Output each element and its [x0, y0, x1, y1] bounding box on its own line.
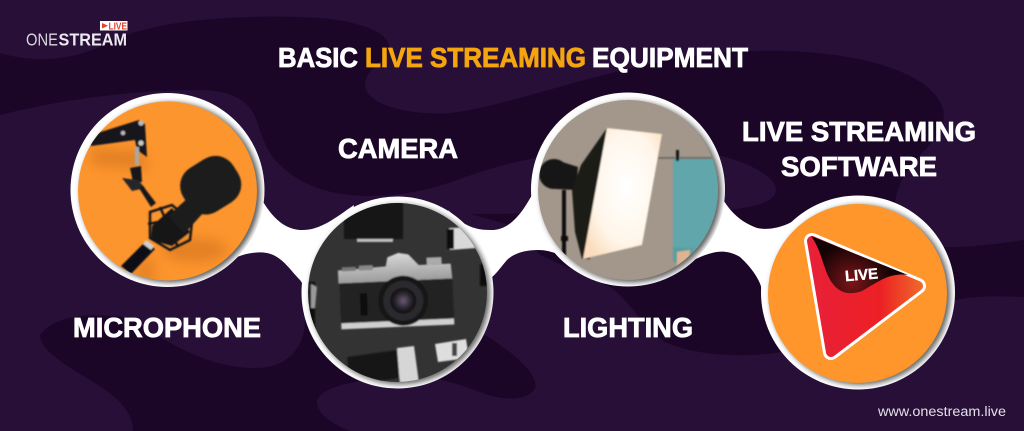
- label: camera: CAMERA: [338, 133, 458, 164]
- label: live streaming software: LIVE STREAMING: [742, 116, 976, 147]
- panel: microphone photo: [70, 93, 270, 290]
- panel: live streaming software icon: [761, 196, 955, 390]
- logo: [26, 21, 128, 50]
- website url: www.onestream.live: [877, 404, 1006, 419]
- logo wordmark bold: STREAM: [58, 30, 127, 50]
- icon: play triangle: [811, 236, 918, 352]
- logo play icon: [102, 23, 108, 28]
- label: lighting: LIGHTING: [563, 312, 693, 343]
- panel: lighting photo: [530, 92, 725, 286]
- label: live streaming software: [742, 116, 976, 182]
- logo badge: [100, 21, 128, 30]
- title part: basic: BASIC: [278, 42, 358, 73]
- title part: live streaming: LIVE STREAMING: [365, 42, 586, 73]
- logo wordmark light: ONE: [26, 30, 58, 50]
- icon label: LIVE: [844, 265, 879, 285]
- title part: equipment: EQUIPMENT: [592, 42, 748, 73]
- logo live text: LIVE: [108, 22, 127, 32]
- title: [278, 42, 748, 73]
- white connector ribbon: [225, 175, 806, 300]
- label: microphone: MICROPHONE: [73, 312, 261, 343]
- label: live streaming software: SOFTWARE: [781, 151, 937, 182]
- panel: camera photo: [300, 195, 500, 390]
